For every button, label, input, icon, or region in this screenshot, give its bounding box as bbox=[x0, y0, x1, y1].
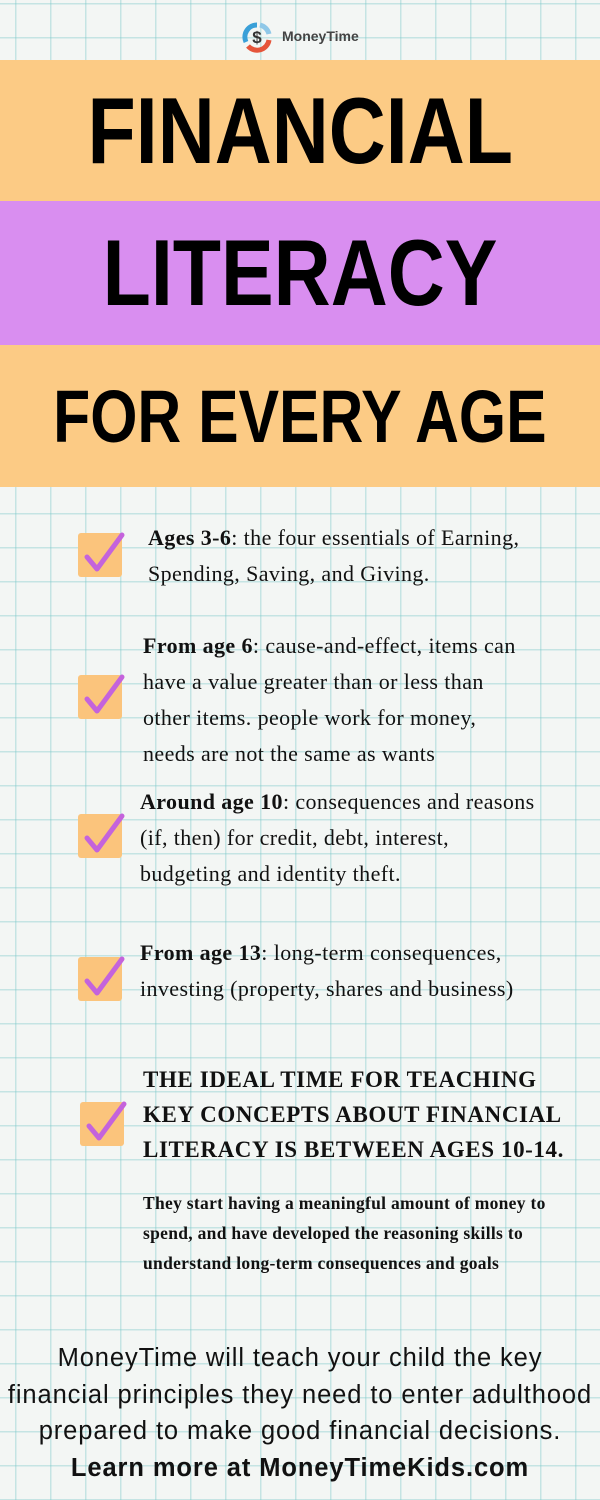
heading: KEY CONCEPTS ABOUT FINANCIAL bbox=[143, 1102, 562, 1127]
text bbox=[148, 525, 519, 586]
footer text bbox=[8, 1344, 592, 1482]
text: have a value greater than or less than bbox=[143, 669, 484, 694]
item 1 bbox=[78, 525, 519, 586]
footer text: prepared to make good financial decisions. bbox=[39, 1417, 561, 1445]
heading: THE IDEAL TIME FOR TEACHING bbox=[143, 1067, 537, 1092]
title band: for every age: FOR EVERY AGE bbox=[53, 374, 547, 458]
text: other items. people work for money, bbox=[143, 705, 476, 730]
text: Spending, Saving, and Giving. bbox=[148, 561, 430, 586]
text: Around age 10: consequences and reasons bbox=[140, 789, 535, 814]
icon: logo mark bbox=[242, 22, 272, 53]
item 2 bbox=[78, 633, 516, 766]
text: Ages 3-6: the four essentials of Earning, bbox=[148, 525, 519, 550]
text bbox=[140, 789, 535, 886]
footer text: financial principles they need to enter adulthood bbox=[8, 1380, 592, 1408]
icon: checkbox bbox=[78, 533, 122, 577]
heading: LITERACY IS BETWEEN AGES 10-14. bbox=[143, 1137, 564, 1162]
logo text: MoneyTime bbox=[282, 28, 359, 44]
text: (if, then) for credit, debt, interest, bbox=[140, 825, 449, 850]
item 5: key insight bbox=[80, 1067, 564, 1273]
text: From age 6: cause-and-effect, items can bbox=[143, 633, 516, 658]
text: budgeting and identity theft. bbox=[140, 861, 401, 886]
text: investing (property, shares and business) bbox=[140, 976, 514, 1001]
icon: checkbox bbox=[78, 957, 122, 1001]
footer text: Learn more at MoneyTimeKids.com bbox=[71, 1454, 529, 1482]
text: From age 13: long-term consequences, bbox=[140, 940, 502, 965]
title band: financial: FINANCIAL bbox=[87, 78, 513, 182]
paragraph bbox=[143, 1193, 546, 1273]
logo bbox=[242, 22, 359, 53]
title band: for every age bbox=[0, 345, 600, 487]
paragraph: understand long-term consequences and goals bbox=[143, 1253, 499, 1273]
title band: literacy: LITERACY bbox=[103, 220, 497, 325]
title band: financial bbox=[0, 60, 600, 201]
footer text: MoneyTime will teach your child the key bbox=[58, 1344, 542, 1372]
item 4 bbox=[78, 940, 514, 1001]
text: needs are not the same as wants bbox=[143, 741, 435, 766]
paragraph: They start having a meaningful amount of money to bbox=[143, 1193, 546, 1213]
item 3 bbox=[78, 789, 535, 886]
heading bbox=[143, 1067, 564, 1162]
paragraph: spend, and have developed the reasoning skills to bbox=[143, 1223, 523, 1243]
text bbox=[143, 633, 516, 766]
icon: checkbox bbox=[78, 675, 122, 719]
title band: literacy bbox=[0, 201, 600, 345]
icon: checkbox bbox=[78, 814, 122, 858]
text bbox=[140, 940, 514, 1001]
icon: checkbox bbox=[80, 1102, 124, 1146]
icon: logo mark: $ bbox=[252, 28, 262, 47]
